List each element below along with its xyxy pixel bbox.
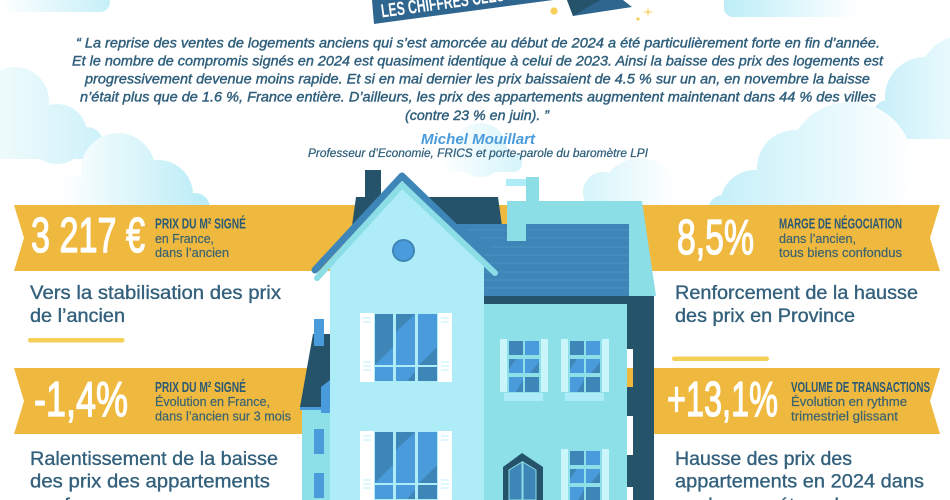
right wing teal roof edge [507,201,656,296]
quote: progressivement devenue moins rapide. Et si en mai dernier les prix baissaient de 4.5 % sur un an, en novembre la baisse [84,70,870,86]
back chimney [365,170,381,200]
heading: stabilisation [30,282,281,327]
cloud: top right [724,0,870,17]
house illustration [300,170,656,500]
stat: -1,4%: dans l’ancien sur 3 mois [155,410,291,424]
main gable wall [330,185,484,500]
cloud: right upper [873,35,950,139]
heading: métropoles: appartements en 2024 dans [675,470,924,492]
wing window upper right [561,339,609,401]
stat: -1,4%: Évolution en France, [155,394,270,409]
quote author: Michel Mouillart [421,132,536,148]
stat: -1,4%: -1,4% [34,373,128,427]
heading: ralentissement: Ralentissement de la baisse [30,448,278,470]
heading: ralentissement [30,448,278,500]
heading: ralentissement: des prix des appartements [30,470,270,492]
stat: 3 217 €: en France, [155,232,214,246]
stat: 3 217 €: 3 217 € [31,209,145,263]
stat: 8,5%: dans l’ancien, [779,232,856,246]
gable blue trim [315,176,460,270]
door [503,453,543,500]
stat: 8,5% [677,211,902,265]
main window upper [360,313,452,382]
stat: 8,5%: tous biens confondus [779,246,902,260]
back dark roof [352,197,502,226]
cloud: behind house right [583,158,680,238]
quote [72,34,884,123]
banner: upper row [14,205,940,271]
stat: -1,4% [34,373,291,427]
cloud: left lower [35,133,210,245]
stat: 3 217 €: PRIX DU M² SIGNÉ [155,216,246,232]
heading: Province: Renforcement de la hausse [675,282,918,304]
gable light trim [317,185,495,278]
ribbon tail [567,0,632,16]
sparkles [550,6,654,21]
heading: stabilisation: de l’ancien [30,305,125,327]
right wing blue roof [445,224,629,296]
title ribbon [372,0,586,24]
main window lower [360,431,452,500]
cloud: left upper [0,67,103,164]
stat: 3 217 €: dans l’ancien [155,246,229,260]
stat: +13,1%: Évolution en rythme [791,394,907,409]
stat: +13,1%: +13,1% [667,373,778,427]
heading: métropoles: Hausse des prix des [675,448,852,470]
cloud: behind quote centre [430,123,522,177]
heading: stabilisation: Vers la stabilisation des prix [30,282,281,304]
round window [393,240,414,261]
heading: métropoles [675,448,924,500]
quote: Et le nombre de compromis signés en 2024 est quasiment identique à celui de 2023. Ainsi la baisse des prix des logements est [72,52,884,68]
wing window upper left [500,339,548,401]
left tower [300,319,330,500]
heading: Province: des prix en Province [675,305,855,327]
heading: Province [675,282,918,327]
cloud: right lower [708,102,913,240]
stat: +13,1%: trimestriel glissant [791,410,899,424]
stat: +13,1% [667,373,930,427]
author role: Professeur d’Economie, FRICS et porte-parole du baromètre LPI [308,148,649,160]
cloud: top left [0,0,110,12]
wing window lower right [561,449,609,500]
stat: -1,4%: PRIX DU M² SIGNÉ [155,379,246,396]
right wing chimney [506,177,539,225]
right wing eave [484,296,654,304]
quote: (contre 23 % en juin). ” [405,107,550,123]
right wing dark column [627,296,654,500]
quote: “ La reprise des ventes de logements anciens qui s’est amorcée au début de 2024 a été particulièrement forte en fin d’année. [76,34,880,50]
quote: n’était plus que de 1.6 %, France entière. D’ailleurs, les prix des appartements augmentent maintenant dans 44 % des villes [80,88,876,104]
stat: 8,5%: 8,5% [677,211,754,265]
banner: lower row [14,368,940,434]
right wing wall [484,304,627,500]
